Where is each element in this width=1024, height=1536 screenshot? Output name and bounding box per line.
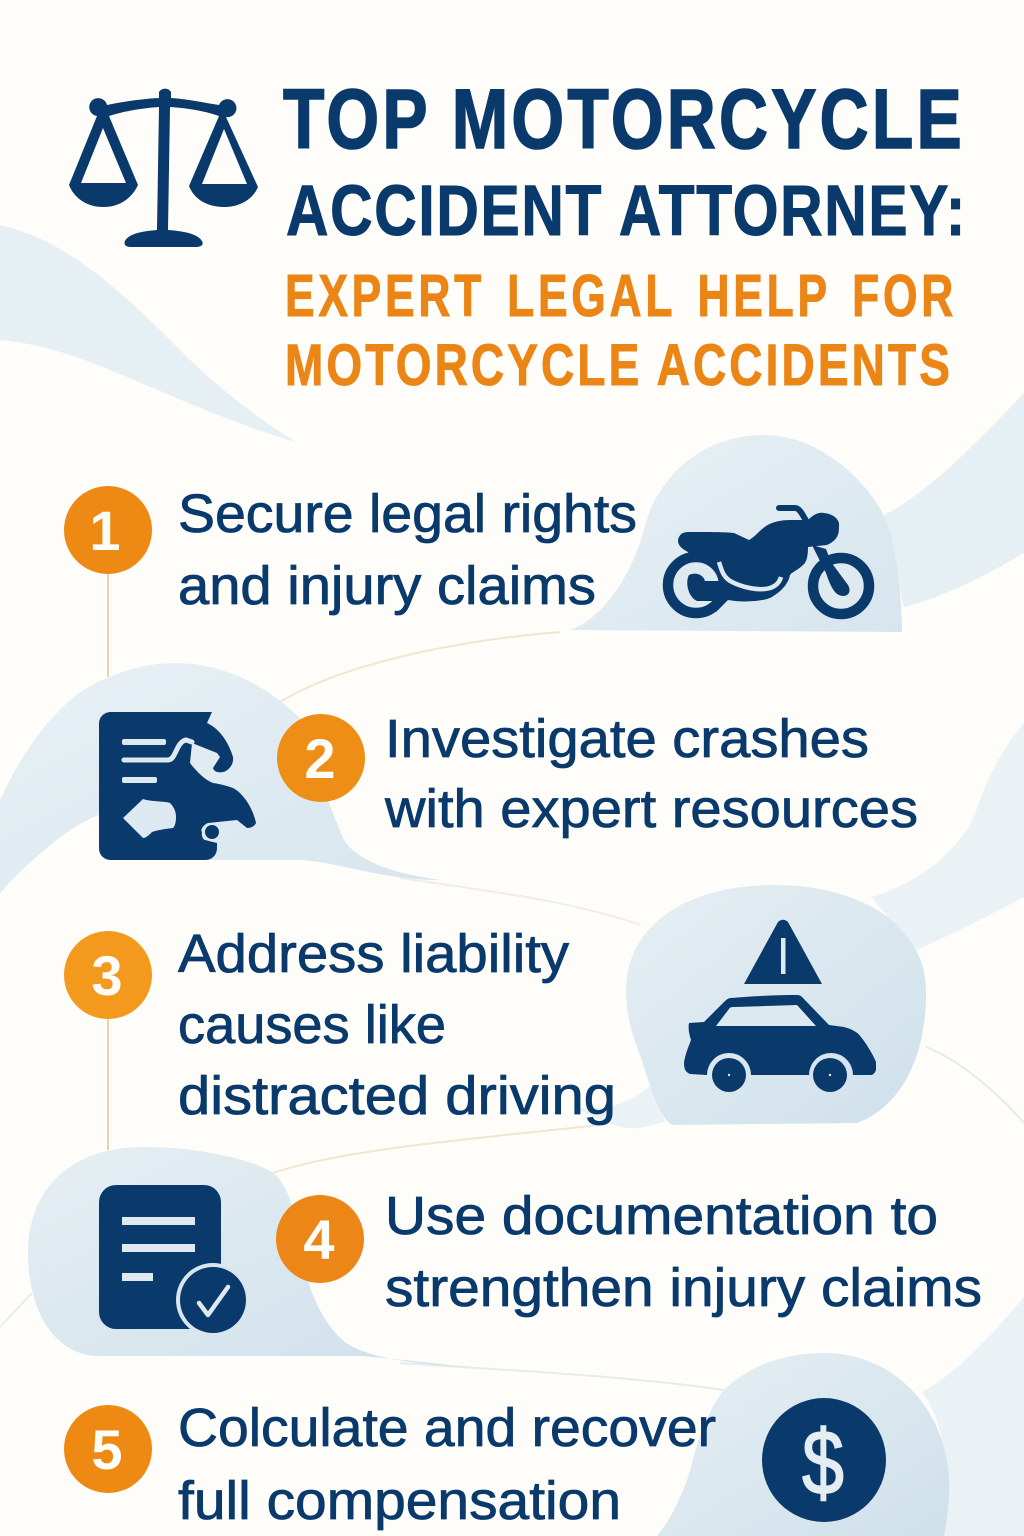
connector lines bbox=[107, 565, 109, 1150]
icon: dollar coin bbox=[762, 1398, 886, 1522]
icon: warning triangle bbox=[744, 920, 822, 984]
icon details: crash report bbox=[122, 739, 192, 838]
icon: motorcycle bbox=[668, 508, 869, 614]
text: step 4: Use documentation to bbox=[385, 1186, 938, 1246]
text: step 3: causes like bbox=[178, 995, 446, 1055]
icon backdrop: step 2 bbox=[0, 663, 440, 893]
panel: step 3 bbox=[28, 885, 982, 1536]
number badge 4: 4 bbox=[303, 1208, 335, 1271]
panel: step 5 bbox=[64, 1353, 949, 1536]
text: step 3: distracted driving bbox=[178, 1066, 616, 1126]
text: step 3 bbox=[178, 924, 616, 1126]
number badge 2: 2 bbox=[304, 727, 336, 790]
icon: crash report bbox=[99, 712, 256, 860]
panel: step 2 bbox=[0, 663, 982, 1536]
text: step 5 bbox=[178, 1398, 716, 1531]
number badge 1: 1 bbox=[89, 499, 121, 562]
panel: step 1 bbox=[64, 435, 902, 632]
text: step 2: Investigate crashes bbox=[385, 709, 869, 769]
number badge 3 bbox=[64, 931, 152, 1019]
number badge 5 bbox=[64, 1405, 152, 1493]
text: step 2 bbox=[384, 709, 918, 839]
text: step 2: with expert resources bbox=[384, 779, 918, 839]
panel: step 4 bbox=[28, 1147, 982, 1536]
icon: dollar coin: $ bbox=[802, 1411, 844, 1514]
title bbox=[283, 72, 967, 251]
number badge 1 bbox=[64, 486, 152, 574]
text: step 4: strengthen injury claims bbox=[385, 1258, 982, 1318]
text: step 1: Secure legal rights bbox=[178, 484, 637, 544]
text: step 4 bbox=[385, 1186, 982, 1318]
number badge 3: 3 bbox=[91, 944, 123, 1007]
icon backdrop: step 4 bbox=[28, 1147, 470, 1367]
icon: car bbox=[684, 995, 876, 1092]
text: step 1 bbox=[178, 484, 637, 616]
icon backdrop: step 3 bbox=[626, 885, 926, 1125]
number badge 5: 5 bbox=[91, 1418, 123, 1481]
icon backdrop: step 5 bbox=[657, 1353, 949, 1536]
text: step 1: and injury claims bbox=[178, 556, 596, 616]
number badge 2 bbox=[277, 714, 365, 802]
number badge 4 bbox=[276, 1195, 364, 1283]
text: step 3: Address liability bbox=[178, 924, 569, 984]
icon: scales of justice bbox=[69, 89, 258, 247]
icon: document with check bbox=[99, 1185, 250, 1337]
icon backdrop: step 1 bbox=[570, 435, 902, 632]
text: step 5: Colculate and recover bbox=[178, 1398, 716, 1458]
subtitle bbox=[285, 263, 957, 398]
text: step 5: full compensation bbox=[178, 1471, 621, 1531]
